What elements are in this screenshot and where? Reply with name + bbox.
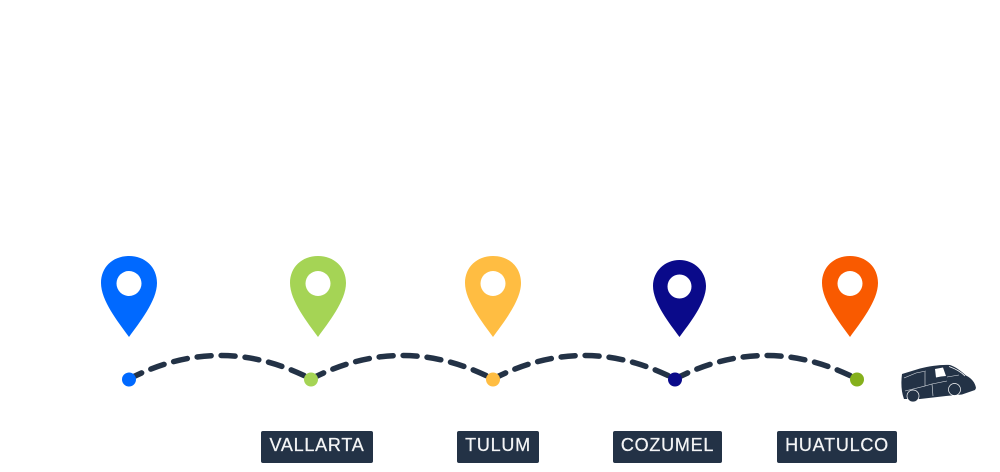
pin: amber (465, 256, 521, 337)
stop marker: navy (668, 372, 682, 386)
pin: orange (822, 256, 878, 337)
label: Cozumel (613, 431, 722, 463)
pin: blue (101, 256, 157, 337)
label: Tulum: TULUM (465, 435, 531, 455)
label: Vallarta (261, 431, 373, 463)
pin: navy (653, 260, 706, 337)
icon: van (901, 365, 976, 402)
pin: green (290, 256, 346, 337)
label: Huatulco (777, 431, 897, 463)
stop marker: blue (122, 372, 136, 386)
label: Cozumel: COZUMEL (621, 435, 714, 455)
label: Tulum (457, 431, 539, 463)
label: Vallarta: VALLARTA (269, 435, 365, 455)
stop marker: olive (850, 372, 864, 386)
stop marker: amber (486, 372, 500, 386)
stop marker: green (304, 372, 318, 386)
label: Huatulco: HUATULCO (785, 435, 889, 455)
dashed route (129, 356, 857, 379)
